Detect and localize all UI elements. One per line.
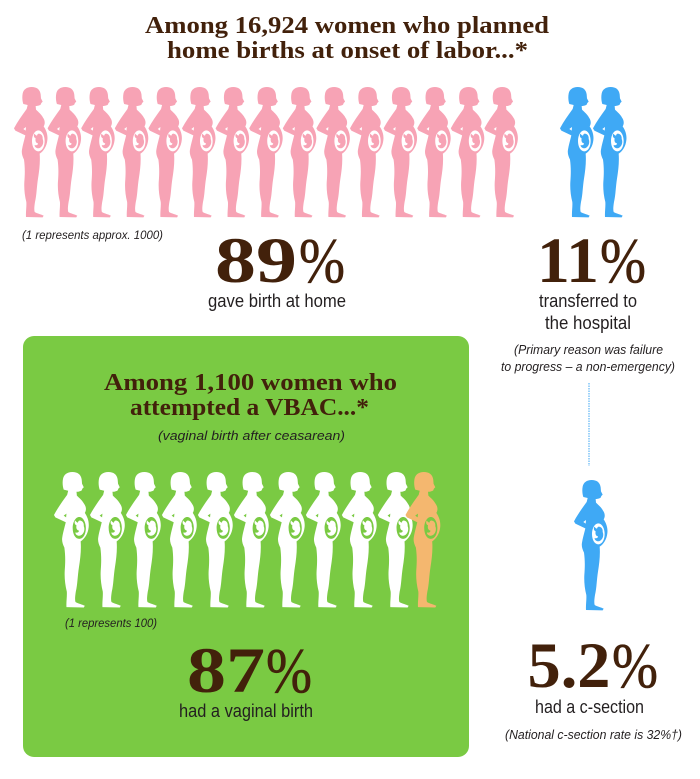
stat: 11% — [537, 225, 646, 297]
note: pictogram scale, 100: (1 represents 100) — [65, 618, 157, 630]
stat: 11%: 11 — [537, 225, 599, 297]
stat: 5.2% — [528, 630, 658, 702]
pictogram: 1 blue woman, had a c-section — [574, 480, 607, 610]
pictogram: 15 pink women, gave birth at home — [14, 87, 518, 217]
title: home births: Among 16,924 women who planned — [145, 13, 550, 39]
stat: 89% — [215, 225, 345, 297]
label: transferred to the hospital: transferred to — [539, 291, 637, 311]
note: primary reason for transfer: (Primary reason was failure — [514, 342, 663, 357]
label: gave birth at home: gave birth at home — [208, 291, 346, 311]
note: national c-section rate: (National c-section rate is 32%†) — [505, 727, 682, 742]
stat: 5.2%: % — [612, 631, 658, 701]
heading: VBAC: Among 1,100 women who — [104, 370, 397, 396]
connector: dotted line to c-section figure — [588, 383, 590, 466]
stat: 87%: 87 — [187, 635, 265, 707]
stat: 89%: 89 — [215, 225, 297, 297]
label: transferred to the hospital: the hospital — [545, 313, 631, 333]
label: transferred to the hospital — [539, 291, 637, 333]
title: home births — [145, 13, 550, 64]
stat: 87%: % — [266, 636, 312, 706]
heading: VBAC: attempted a VBAC...* — [130, 395, 369, 421]
title: home births: home births at onset of labor...* — [167, 38, 528, 64]
note: VBAC definition: (vaginal birth after ceasarean) — [158, 428, 345, 443]
heading: VBAC — [104, 370, 397, 421]
note: primary reason for transfer: to progress – a non-emergency) — [501, 359, 675, 374]
label: had a vaginal birth: had a vaginal birth — [179, 701, 313, 721]
label: had a c-section: had a c-section — [535, 697, 644, 717]
pictogram: 2 blue women, transferred to hospital — [560, 87, 626, 217]
note: pictogram scale, approx 1000: (1 represents approx. 1000) — [22, 230, 163, 242]
stat: 11%: % — [600, 226, 646, 296]
pictogram: 1 orange woman, c-section — [406, 472, 440, 608]
pictogram: 10 white women, vaginal birth — [54, 472, 413, 608]
stat: 5.2%: 5.2 — [528, 630, 610, 702]
panel: VBAC — [23, 336, 469, 757]
stat: 87% — [187, 635, 312, 707]
panel background — [23, 336, 469, 757]
stat: 89%: % — [299, 226, 345, 296]
note: primary reason for transfer — [501, 342, 675, 374]
